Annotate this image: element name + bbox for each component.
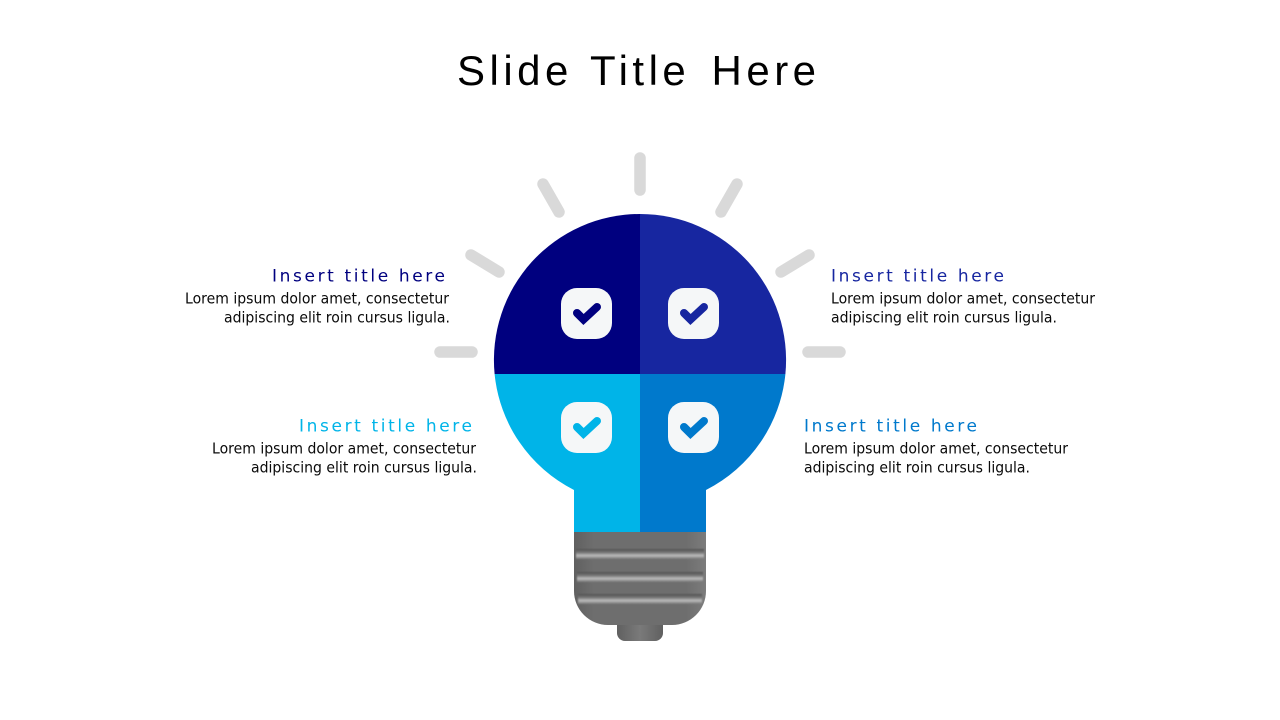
text block: top left (185, 266, 450, 326)
text block: bottom right (804, 416, 1069, 476)
text block: top right: adipiscing elit roin cursus ligula. (831, 308, 1057, 326)
bulb tip (617, 625, 663, 641)
text block: bottom left: Insert title here (299, 416, 472, 436)
text block: bottom left (212, 416, 477, 476)
text block: bottom right: adipiscing elit roin cursus ligula. (804, 458, 1030, 476)
icon: check top right (668, 288, 719, 339)
icon: check bottom right (668, 402, 719, 453)
bulb screw base (574, 532, 706, 641)
text block: top left: Insert title here (272, 266, 445, 286)
icon: check top left (561, 288, 612, 339)
text block: bottom right: Insert title here (804, 416, 977, 436)
bulb quadrant: bottom left (495, 374, 640, 532)
light rays (440, 158, 840, 352)
icon: check bottom left (561, 402, 612, 453)
bulb quadrant: bottom right (640, 374, 785, 532)
title: Title (590, 47, 690, 94)
text block: top left: Lorem ipsum dolor amet, consectetur (185, 290, 450, 308)
text block: top right: Insert title here (831, 266, 1004, 286)
text block: top left: adipiscing elit roin cursus ligula. (224, 308, 450, 326)
title: Slide (457, 47, 573, 94)
light bulb (494, 214, 786, 641)
text block: bottom left: adipiscing elit roin cursus ligula. (251, 458, 477, 476)
text block: top right: Lorem ipsum dolor amet, consectetur (831, 290, 1096, 308)
text block: bottom right: Lorem ipsum dolor amet, consectetur (804, 440, 1069, 458)
text block: bottom left: Lorem ipsum dolor amet, consectetur (212, 440, 477, 458)
text block: top right (831, 266, 1096, 326)
bulb quadrant: top left (494, 214, 640, 374)
title: Here (712, 47, 821, 94)
bulb quadrant: top right (640, 214, 786, 374)
